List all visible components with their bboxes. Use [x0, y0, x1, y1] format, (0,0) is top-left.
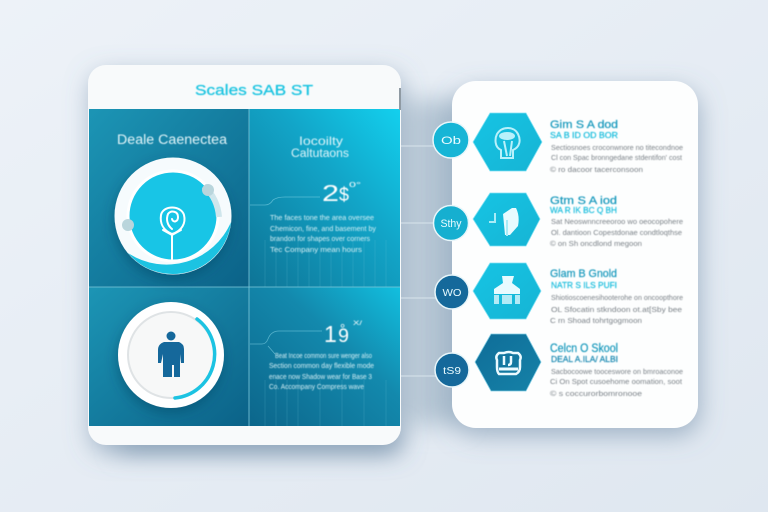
item 3: package: [435, 263, 683, 325]
text: item 1: [550, 119, 683, 174]
text: item 1: Gim S A dod: [550, 119, 618, 131]
badge 2: [434, 206, 468, 240]
icon: devices: [489, 208, 519, 236]
text: item 4: Celcn O Skool: [550, 343, 618, 355]
hexagon 4: [475, 334, 541, 391]
panel: left card: [88, 65, 401, 445]
icon: bottom circular gauge: [118, 302, 224, 408]
heading: card title: Scales SAB ST: [195, 82, 313, 99]
text: item 2: Sat Neoswnncreeoroo wo oeocopohere: [551, 219, 683, 226]
panel: teal background: [89, 109, 400, 426]
text block: top description: Tec Company mean hours: [270, 247, 363, 254]
number: top stat: 0°: [349, 181, 361, 189]
hexagon 3: [473, 263, 541, 319]
hexagon 1: [473, 113, 542, 171]
icon: basket: [496, 352, 521, 374]
text: item 1: SA B ID OD BOR: [550, 131, 618, 140]
icon: person: [158, 332, 184, 377]
connector: top stat callout: [250, 197, 320, 205]
number: bottom stat: °: [340, 321, 345, 336]
text: item 3: C rn Shoad tohrtgogmoon: [550, 318, 642, 325]
item 1: lightbulb: [433, 113, 683, 174]
number: top stat: 2: [322, 180, 339, 206]
item 2: devices: [434, 193, 683, 248]
heading: left column title: Deale Caenectea: [117, 132, 228, 147]
panel: right card: [452, 81, 698, 428]
text: item 1: © ro dacoor tacerconsoon: [550, 166, 643, 174]
text: item 2: © on Sh oncdlond megoon: [550, 240, 642, 248]
text block: top description: brandon for shapes over corners: [270, 236, 370, 243]
heading: right column title: Iocoilty: [299, 134, 343, 148]
text block: bottom description: Beat Incoe common sure wenger also: [275, 353, 372, 360]
number: bottom stat: X/: [353, 321, 363, 327]
badge 3: [435, 275, 469, 309]
badge 2: Sthy: [440, 218, 462, 230]
text: item 4: Sacbocoowe tooceswore on bmroaconoe: [551, 369, 683, 376]
connector: bottom stat callout: [250, 331, 322, 354]
hexagon 2: [473, 193, 540, 246]
heading: right column title: [291, 134, 349, 160]
text: item 2: Ol. dantioon Copestdonae condtloqthse: [551, 230, 682, 237]
text: item 4: DEAL A.ILA/ ALBI: [551, 355, 618, 364]
icon: package: [494, 276, 520, 304]
text block: bottom description: [269, 353, 374, 391]
text block: top description: Chemicon, fine, and basement by: [270, 226, 376, 233]
text: item 2: Gtm S A iod: [550, 195, 617, 207]
text: item 1: Cl con Spac bronngedane stdentifon' cost: [551, 155, 682, 162]
text block: bottom description: Co. Accompany Compress wave: [269, 384, 364, 391]
number: bottom stat: 9: [338, 326, 349, 347]
icon: lightbulb: [496, 128, 520, 158]
badge 3: WO: [442, 288, 462, 299]
text: item 3: [550, 268, 683, 325]
number: bottom stat: [324, 321, 363, 347]
text: item 2: WA R IK BC Q BH: [550, 206, 617, 215]
badge 4: [435, 353, 469, 387]
number: top stat: [322, 180, 361, 206]
badge 1: [433, 122, 469, 158]
number: top stat: $: [339, 185, 349, 206]
text block: bottom description: enace now Shadow wear for Base 3: [269, 374, 372, 381]
text: item 3: Glam B Gnold: [550, 268, 617, 280]
text block: top description: [270, 215, 376, 254]
item 4: basket: [435, 334, 683, 398]
text: item 4: [550, 343, 683, 398]
text: item 1: Sectiosnoes croconwnore no titecondnoe: [551, 145, 683, 152]
badge 4: tS9: [443, 366, 462, 377]
connector lines: [401, 146, 436, 376]
text block: bottom description: Section common day flexible mode: [269, 363, 374, 370]
text: item 4: Ci On Spot cusoehome oomation, soot: [550, 379, 682, 386]
badge 1: Ob: [441, 135, 461, 147]
text block: top description: The faces tone the area oversee: [270, 215, 374, 222]
number: bottom stat: 1: [324, 321, 337, 347]
text: item 2: [550, 195, 683, 248]
text: item 3: OL Sfocatin stkndoon ot.at[Sby bee: [551, 307, 682, 314]
heading: right column title: Caltutaons: [291, 148, 349, 160]
text: item 3: Shiotioscoenesihooterohe on oncoopthore: [551, 295, 683, 302]
text: item 4: © s coccurorbomronooe: [550, 390, 642, 398]
icon: top circular gauge: [114, 158, 232, 274]
text: item 3: NATR S ILS PUFI: [551, 281, 617, 290]
